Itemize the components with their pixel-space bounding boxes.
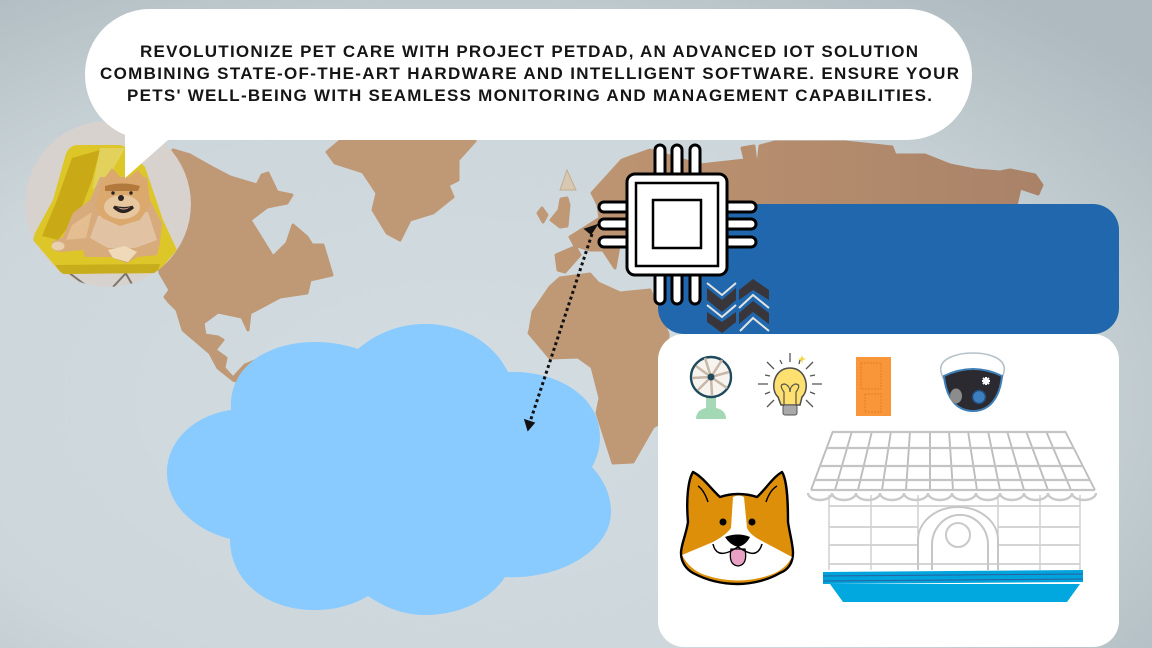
speech bubble <box>85 9 972 178</box>
icon: up chevrons <box>739 279 769 331</box>
icon: fan <box>691 357 731 419</box>
icon: security camera <box>941 353 1004 411</box>
photo: pomeranian on yellow chair <box>25 121 191 287</box>
corgi white blaze and muzzle <box>682 496 792 580</box>
corgi nose and mouth <box>725 534 750 547</box>
cloud <box>167 324 611 615</box>
icon: down chevrons <box>707 283 736 333</box>
map: North America <box>150 150 332 385</box>
arrow: dotted link between cloud and chip <box>525 225 597 430</box>
world map <box>150 141 1042 463</box>
icon: microchip <box>599 145 756 304</box>
corgi tongue <box>730 549 746 566</box>
chair legs <box>68 272 133 287</box>
illustration: pet cage <box>808 431 1096 602</box>
dog body <box>52 177 162 263</box>
intro text: REVOLUTIONIZE PET CARE WITH PROJECT PETDAD, AN ADVANCED IOT SOLUTION <box>140 42 918 61</box>
icon: sailboat pin <box>560 170 576 190</box>
icon: orange door <box>856 357 891 416</box>
map: Ireland <box>538 208 547 222</box>
map: Europe and Asia <box>556 142 1042 272</box>
icon: corgi face <box>681 472 793 584</box>
dog paws <box>108 246 137 262</box>
intro text: COMBINING STATE-OF-THE-ART HARDWARE AND INTELLIGENT SOFTWARE. ENSURE YOUR <box>100 64 959 83</box>
map: Britain <box>551 198 569 227</box>
intro text: PETS' WELL-BEING WITH SEAMLESS MONITORING AND MANAGEMENT CAPABILITIES. <box>127 86 932 105</box>
icon: light bulb <box>758 353 822 415</box>
chip pins <box>599 145 756 304</box>
yellow chair <box>33 145 177 274</box>
intro text <box>100 42 959 105</box>
corgi eyes <box>720 518 726 526</box>
map: Africa <box>529 274 668 463</box>
cage body wires <box>829 495 1080 570</box>
corgi head <box>681 472 793 584</box>
map: Greenland <box>327 141 475 240</box>
cage tray <box>830 584 1080 602</box>
chip body <box>627 174 727 275</box>
panel: white devices card <box>658 334 1119 647</box>
cage roof wires <box>811 431 1095 490</box>
dog head <box>95 168 150 226</box>
cage door arches <box>918 507 998 570</box>
panel: blue hardware banner <box>658 204 1119 334</box>
dog face <box>118 195 124 201</box>
